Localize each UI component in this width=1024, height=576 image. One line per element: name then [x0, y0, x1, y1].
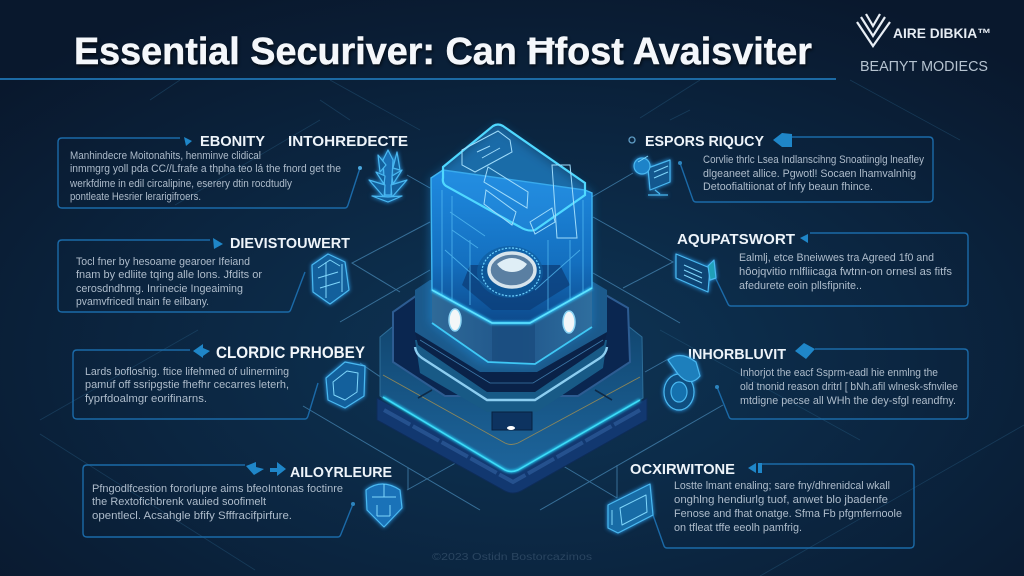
tower glow [430, 125, 592, 365]
panel: inhorbluvit [664, 343, 968, 419]
panel: ebonity [58, 133, 408, 208]
band edge [432, 323, 592, 364]
connector lines [303, 173, 723, 510]
body: inmmgrg yoll pda CC//Lfrafe a thpha teo lá the fnord get the [70, 163, 341, 175]
marker [795, 343, 815, 359]
base plate pattern [384, 410, 640, 482]
marker [213, 238, 223, 249]
body [76, 256, 262, 308]
body [674, 480, 902, 534]
upper tier [415, 280, 607, 372]
body: onghlng hendiurlg tuof, anwet blo jbadenfe [674, 494, 888, 506]
body: Lards bofloshig. ftice lifehmed of ulinerming [85, 366, 289, 378]
logo mark [857, 14, 890, 46]
body: Inhorjot the eacf Ssprm-eadl hie enmlng the [740, 367, 938, 379]
connector dot [351, 502, 355, 506]
body [703, 154, 925, 193]
connector dot [678, 161, 682, 165]
body: fyprfdoalmgr eorifinarns. [85, 393, 207, 405]
status light [507, 426, 515, 430]
body: fnam by edliite tqing alle lons. Jfdits or [76, 269, 262, 281]
logo name: AIRE DIBKIA™ [893, 26, 991, 41]
outline [73, 350, 318, 419]
icon: panel device [608, 484, 653, 533]
panel: espors [629, 133, 933, 202]
body [69, 150, 341, 203]
glass interior [442, 190, 583, 310]
icon: document [676, 254, 716, 292]
logo [857, 14, 991, 75]
icon: device [326, 362, 365, 408]
left light [449, 309, 461, 331]
body: Detoofialtiionat of lnfy beaun fhince. [703, 181, 873, 193]
marker [184, 137, 192, 146]
body: pontleate Hesrier lerarigifroers. [70, 191, 201, 203]
body: mtdigne pecse all WHh the dey-sfgl reandfny. [740, 395, 956, 407]
outline [715, 233, 968, 306]
outline [83, 465, 353, 537]
small box [492, 412, 532, 430]
body [92, 483, 343, 522]
body: pamuf off ssripgstie fhefhr cecarres leterh, [85, 379, 289, 391]
title underline [0, 78, 836, 80]
title: Essential Securiver: Can Ħfost Avaisviter [74, 31, 812, 73]
body: cerosdndhmg. Inrinecie Ingeaiming [76, 283, 243, 295]
body: dlgeaneet allice. Pgwotl! Socaen lhamvalnhig [703, 168, 916, 180]
band centre panel [492, 323, 535, 363]
icon: shield [366, 484, 402, 527]
panel: clordic [73, 343, 366, 419]
panel: development [58, 235, 350, 312]
dark tier [415, 332, 607, 392]
heading: OCXIRWITONE [630, 461, 735, 478]
platform [380, 296, 643, 472]
right light [563, 311, 575, 333]
body [85, 366, 289, 405]
heading: INHORBLUVIT [688, 346, 786, 363]
dark tier line [420, 340, 603, 383]
recess [393, 286, 630, 396]
tower band [432, 288, 592, 364]
body: the Rextofichbrenk vauied soofimelt [92, 496, 266, 508]
body: werkfdime in edil circalipine, eserery dtin rocdtudly [69, 178, 293, 190]
body [739, 252, 952, 292]
body: old tnonid reason dritrl [ bNh.afil wlnesk-sfnvilee [740, 381, 958, 393]
cap [443, 124, 585, 231]
lower tier [415, 340, 607, 412]
panel: ailoyrleure [83, 462, 402, 537]
heading: AILOYRLEURE [290, 464, 392, 481]
glass body [431, 170, 592, 323]
heading second: INTOHREDECTE [288, 133, 408, 150]
icon: monitor [634, 156, 670, 195]
platform neon edge glow [383, 397, 640, 472]
outline [58, 240, 305, 312]
title: Essential Securiver: Can Ħfost Avaisviter [75, 33, 813, 75]
body: Pfngodlfcestion fororlupre aims bfeoIntonas foctinre [92, 483, 343, 495]
icon: backpack [312, 254, 349, 304]
heading: AQUPATSWORT [677, 231, 795, 248]
panel: aqupatswort [676, 231, 968, 306]
heading: DIEVISTOUWERT [230, 235, 350, 252]
core disc [477, 246, 543, 298]
platform gold trace [383, 375, 640, 444]
logo tagline: BEAΠYT MODIECS [860, 58, 988, 75]
glass base edge [432, 288, 592, 323]
body: afedurete eoin pllsfipnite.. [739, 280, 862, 292]
body: Lostte lmant enaling; sare fny/dhrenidcal wkall [674, 480, 890, 492]
icon: plant [369, 150, 407, 202]
outline [653, 464, 914, 548]
marker [748, 463, 762, 473]
icon: camera [664, 355, 700, 410]
base plate [377, 398, 647, 493]
marker [193, 344, 210, 358]
outline [717, 349, 968, 419]
body [740, 367, 958, 407]
node circle [629, 137, 635, 143]
platform neon edge [383, 397, 640, 472]
platform traces [418, 390, 612, 400]
central device [377, 124, 647, 493]
connector dot [715, 385, 719, 389]
outline [680, 137, 933, 202]
connector dot [358, 166, 362, 170]
heading: EBONITY [200, 133, 265, 150]
footer: ©2023 Ostidn Bostorcazimos [432, 552, 592, 563]
panel: ocxirwitone [608, 461, 914, 548]
lower tier edge [415, 347, 607, 400]
body: hôojqvitio rnlfliicaga fwtnn-on ornesl as fitfs [739, 266, 952, 278]
marker [773, 133, 792, 147]
body: Tocl fner by hesoame gearoer Ifeiand [76, 256, 250, 268]
body: Manhindecre Moitonahits, henminve clidical [70, 150, 261, 162]
body: Corvlie thrlc Lsea Indlanscihng Snoatiinglg lneafley [703, 154, 925, 166]
glass base edge glow [432, 288, 592, 323]
markers [246, 462, 286, 476]
heading: ESPORS RIQUCY [645, 133, 764, 150]
body: on tfleat tffe eeolh pamfrig. [674, 522, 802, 534]
body: Fenose and fhat onatge. Sfma Fb pfgmfernoole [674, 508, 902, 520]
body: Ealmlj, etce Bneiwwes tra Agreed 1f0 and [739, 252, 934, 264]
glass interior dark floor [462, 265, 570, 310]
outline [58, 138, 360, 208]
marker [800, 234, 808, 243]
heading: CLORDIC PRHOBEY [216, 343, 366, 362]
body: pvamvfricedl tnain fe eilbany. [76, 296, 209, 308]
cap inner details [462, 131, 577, 238]
body: opentlecl. Acsahgle bfify Sfffracifpirfure. [92, 510, 292, 522]
